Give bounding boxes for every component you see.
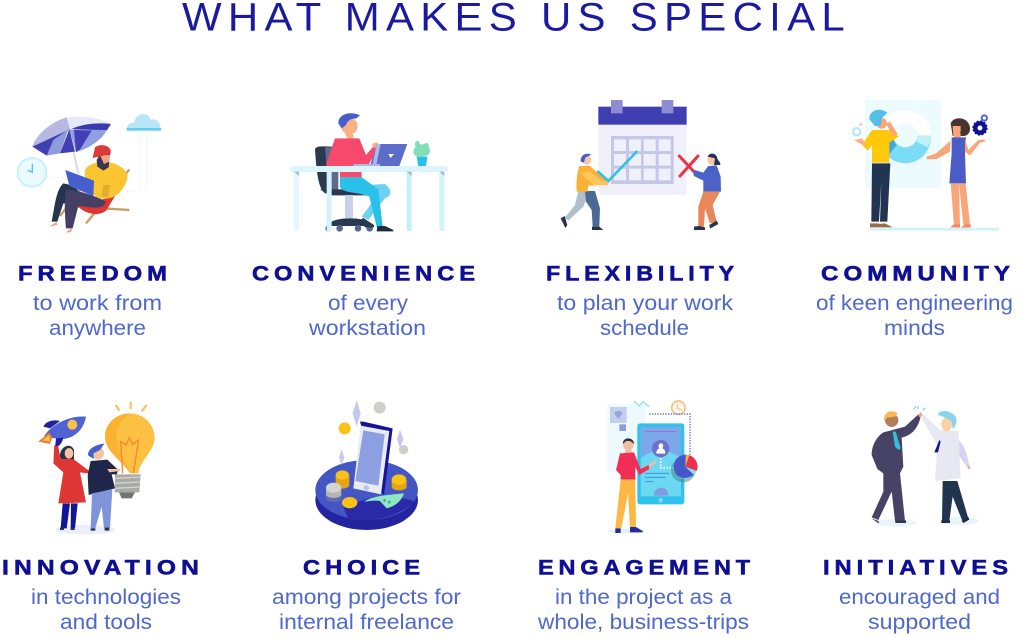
text block: of keen engineering <box>816 292 1013 315</box>
text block: in technologies <box>31 586 181 609</box>
text block: internal freelance <box>279 611 454 634</box>
text block <box>31 586 181 634</box>
icon: man under a beach umbrella <box>18 114 161 233</box>
heading: ENGAGEMENT <box>538 556 755 580</box>
text block: workstation <box>308 317 426 340</box>
text block: to plan your work <box>557 292 734 315</box>
text block <box>272 586 461 634</box>
text block: whole, business-trips <box>537 611 749 634</box>
heading: COMMUNITY <box>821 262 1015 286</box>
icon: two people by a donut chart <box>848 100 999 231</box>
icon: man presenting a tablet <box>607 401 698 533</box>
text block: supported <box>868 611 971 634</box>
heading: CHOICE <box>303 556 425 580</box>
text block <box>816 292 1013 340</box>
icon: man working at a desk <box>290 113 448 232</box>
panel: community <box>816 100 1015 340</box>
panel: choice <box>272 400 461 634</box>
panel: innovation <box>2 402 204 634</box>
text block: encouraged and <box>839 586 1000 609</box>
text block: minds <box>884 317 945 340</box>
heading: INNOVATION <box>2 556 204 580</box>
heading: FREEDOM <box>18 262 172 286</box>
icon: two people at a calendar <box>561 100 721 230</box>
text block: anywhere <box>49 317 146 340</box>
icon: two people giving a high five <box>871 406 979 526</box>
text block <box>33 292 162 340</box>
text block: in the project as a <box>555 586 732 609</box>
text block: among projects for <box>272 586 461 609</box>
heading: FLEXIBILITY <box>546 262 739 286</box>
text block: schedule <box>600 317 689 340</box>
icon: people with rocket and light bulb <box>38 402 155 534</box>
text block <box>557 292 734 340</box>
heading: CONVENIENCE <box>252 262 480 286</box>
text block <box>839 586 1000 634</box>
panel: freedom <box>18 114 172 340</box>
text block: of every <box>328 292 409 315</box>
heading: INITIATIVES <box>823 556 1013 580</box>
panel: initiatives <box>823 406 1013 634</box>
text block <box>308 292 426 340</box>
text block <box>537 586 749 634</box>
panel: convenience <box>252 113 480 340</box>
panel: engagement <box>537 401 755 634</box>
panel: flexibility <box>546 100 739 340</box>
icon: phone on a coin platform <box>315 400 418 530</box>
text block: to work from <box>33 292 162 315</box>
text block: and tools <box>60 611 152 634</box>
